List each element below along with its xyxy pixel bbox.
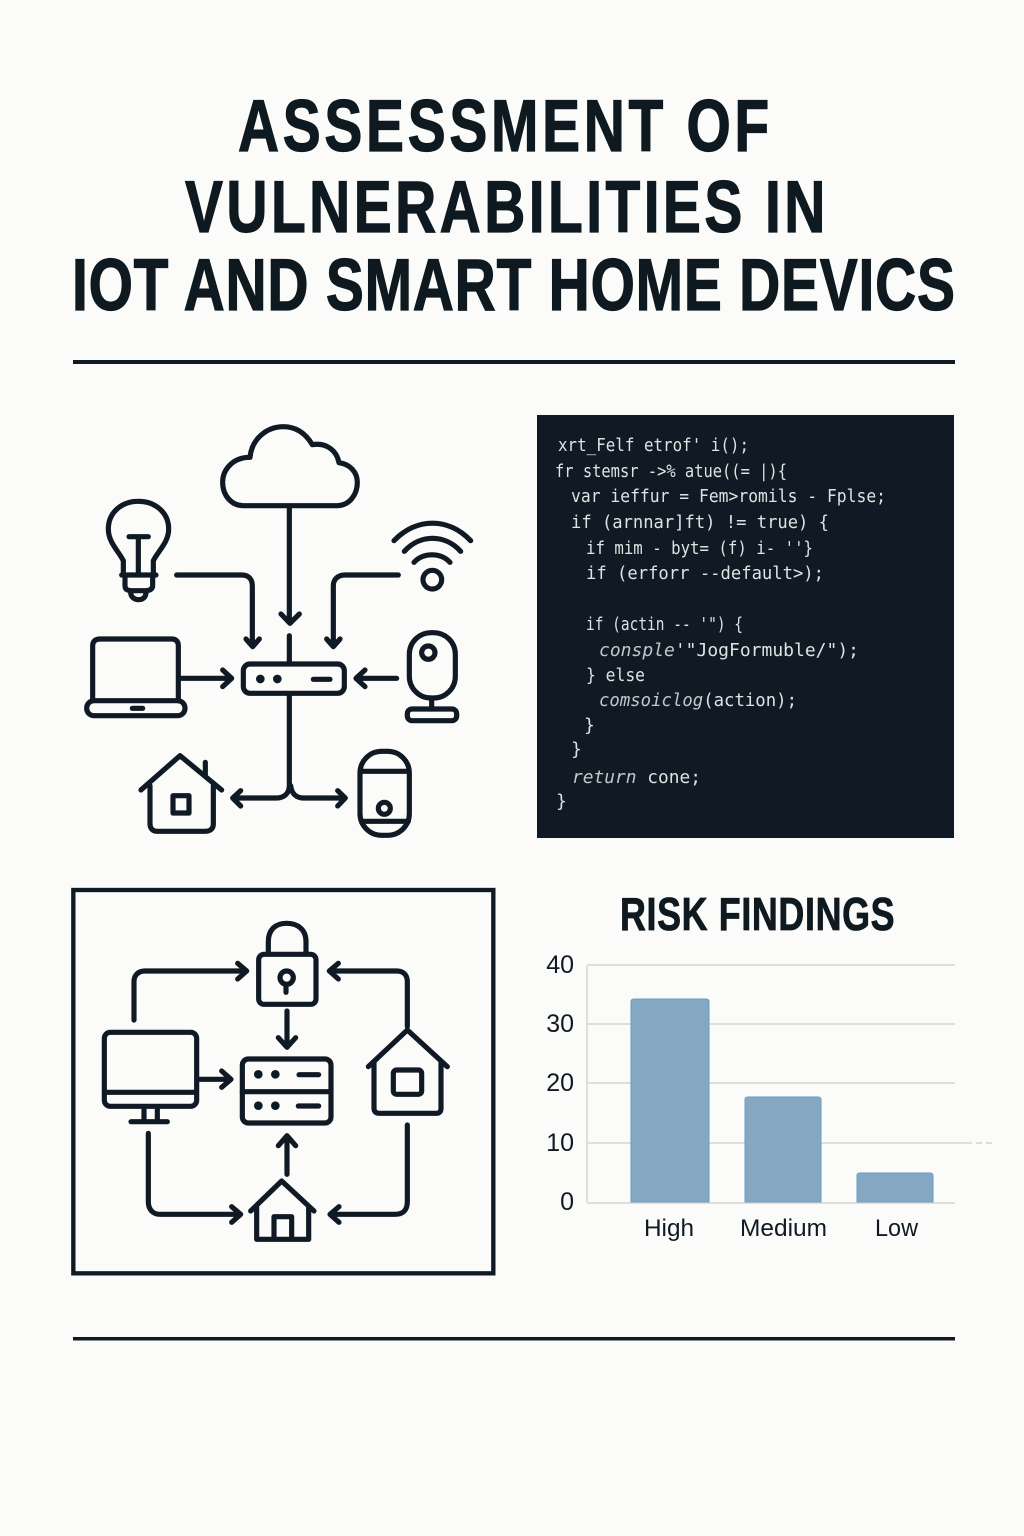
axis labels: High xyxy=(644,1215,694,1242)
icon: server xyxy=(242,1059,331,1123)
axis labels: Medium xyxy=(740,1215,827,1242)
icon: camera xyxy=(407,633,457,721)
arrow: cloud to router xyxy=(281,507,299,623)
icon: right house xyxy=(368,1030,447,1113)
arrow: padlock to server xyxy=(278,1011,296,1047)
arrow: house to padlock xyxy=(329,963,407,1027)
code text: var ieffur = Fem>romils - Fplse; xyxy=(571,486,886,507)
axis labels xyxy=(546,951,919,1242)
arrow: bulb to router xyxy=(177,575,259,647)
arrow: router to home and speaker xyxy=(233,694,345,806)
icon: house xyxy=(141,756,222,831)
code text xyxy=(555,435,886,812)
axis labels: 10 xyxy=(546,1129,574,1157)
axis labels: 0 xyxy=(560,1188,574,1216)
icon: wifi xyxy=(394,523,471,589)
bar: medium xyxy=(745,1097,821,1202)
arrow: bottom house to server xyxy=(278,1136,296,1174)
heading: risk findings: RISK FINDINGS xyxy=(620,889,895,940)
icon: padlock xyxy=(259,923,316,1004)
title: VULNERABILITIES IN xyxy=(185,166,825,248)
code text: return cone; xyxy=(572,767,701,788)
bar: high xyxy=(631,999,709,1202)
icon: monitor xyxy=(104,1032,197,1122)
code text: if mim - byt= (f) i- ''} xyxy=(586,538,813,559)
panel frame xyxy=(73,890,493,1273)
icon: bottom house xyxy=(251,1181,314,1239)
code text: } else xyxy=(586,665,645,686)
arrow: laptop to router xyxy=(181,670,232,687)
panel: smart home network diagram xyxy=(87,427,471,835)
code text: xrt_Felf etrof' i(); xyxy=(558,435,749,456)
axis labels: Low xyxy=(875,1215,919,1242)
arrow: camera to router xyxy=(356,670,397,687)
arrow: monitor to padlock xyxy=(134,963,247,1020)
icon: router xyxy=(243,636,344,693)
panel: code listing xyxy=(537,415,954,838)
icon: laptop xyxy=(87,639,185,716)
code text: if (arnnar]ft) != true) { xyxy=(571,512,829,533)
icon: light bulb xyxy=(108,501,169,600)
arrow: wifi to router xyxy=(327,575,398,647)
axis labels: 20 xyxy=(546,1069,574,1097)
icon: cloud xyxy=(223,427,357,506)
bar chart: risk findings xyxy=(546,951,992,1242)
code text: } xyxy=(556,791,567,812)
arrow: monitor to server xyxy=(199,1071,231,1087)
code text: consple'"JogFormuble/"); xyxy=(599,640,859,661)
code text: if (erforr --default>); xyxy=(586,563,824,584)
title: ASSESSMENT OF xyxy=(238,85,769,167)
code text: fr stemsr ->% atue((= |){ xyxy=(555,461,787,482)
bar: low xyxy=(857,1173,933,1202)
code text: comsoiclog(action); xyxy=(599,690,797,711)
arrow: right house to bottom house xyxy=(330,1125,407,1222)
axis labels: 40 xyxy=(546,951,574,979)
code text: } xyxy=(584,715,595,736)
code text: if (actin -- '") { xyxy=(586,614,743,635)
arrow: monitor to bottom house xyxy=(148,1133,241,1222)
axis labels: 30 xyxy=(546,1010,574,1038)
title: IOT AND SMART HOME DEVICS xyxy=(72,244,955,326)
title xyxy=(72,85,955,326)
code text: } xyxy=(571,739,582,760)
panel: security flow diagram xyxy=(73,890,493,1273)
icon: smart speaker xyxy=(360,751,409,835)
